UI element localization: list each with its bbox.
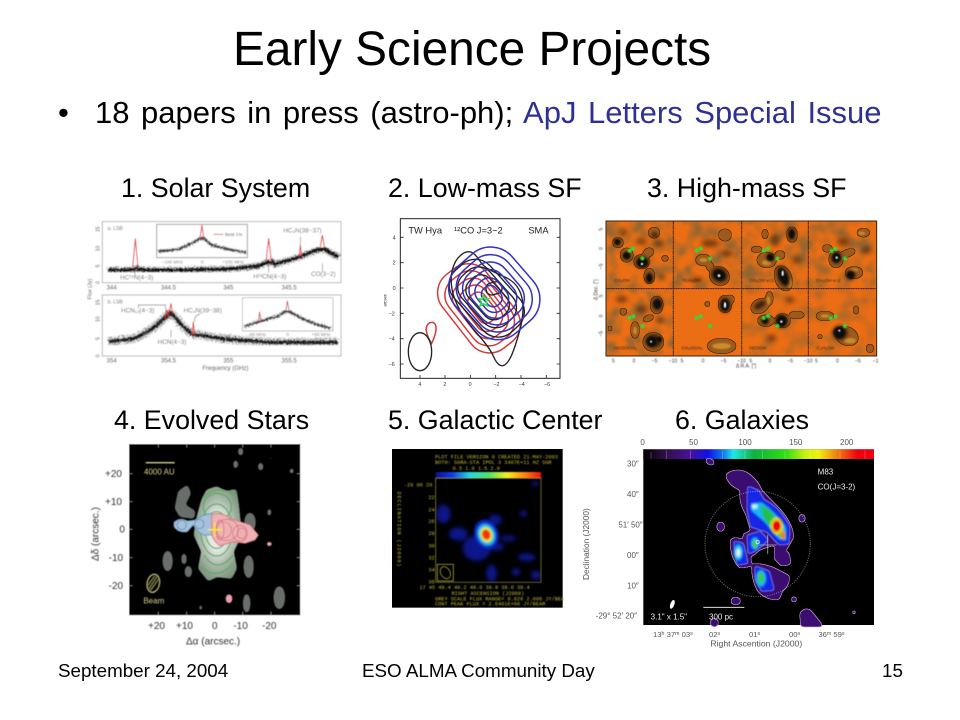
axis labels: Δδ (arcsec.) [90,507,101,561]
map title [408,226,549,236]
channel map axes: −10 [737,359,746,365]
molecule labels: CH₃OH v=2 [816,278,841,283]
inset b: -50 MHz [248,332,267,337]
mottled background [606,221,877,356]
channel map axes: 0 [599,247,605,250]
channel map axes: −5 [855,359,861,365]
spectrum labels: HCN₁₃(4−3) [121,308,154,315]
channel map axes: −5 [721,359,727,365]
spectrum axes: Frequency (GHz) [202,366,248,372]
molecule labels: HCOOH [749,346,767,351]
map axes: −2 [389,311,395,317]
inset b: +50 MHz [312,332,331,337]
map text [395,455,565,608]
inset a: −100 MHz [162,259,184,264]
chart: high-mass SF channel maps [592,220,879,370]
spectrum axes: 344 [107,285,117,291]
axis labels: 0 [212,621,218,632]
declination labels: 00″ [627,551,639,560]
map title: TW Hya [408,226,443,236]
dark cores [615,230,854,347]
heading: galactic center: 5. Galactic Center [388,405,602,435]
molecule labels: ¹³CH₃OH [682,278,700,283]
axis labels: +10 [105,497,122,508]
spectrum labels [108,226,335,346]
chart: evolved star map [90,444,300,648]
channel map axes: −5 [599,331,605,337]
map text: -29 00 20 [404,482,432,488]
spectrum axes: 355 [223,359,234,365]
channel map axes: 5 [612,359,615,365]
footer: date: September 24, 2004 [58,660,228,681]
spectrum labels: CO(3−2) [311,271,335,278]
brown contour blobs [608,227,873,353]
spectrum labels: b. LSB [108,299,123,305]
inset b: 0 [286,332,289,337]
red lobe [212,514,272,603]
blue emission [734,486,790,591]
map axes: −4 [389,337,395,343]
beam ellipse [143,573,165,606]
color bar [436,472,541,478]
spectrum labels: H¹³CN(4−3) [253,274,286,281]
map axes: −4 [519,382,525,388]
map legend: CO(J=3-2) [818,483,856,492]
spectrum axes: 345.5 [282,285,297,291]
white peaks [641,256,840,343]
spectrum labels: a. LSB [108,226,123,232]
channel map axes [593,228,879,370]
emission [436,481,541,582]
map axes [383,235,550,388]
channel map axes: Δ Dec. ["] [593,279,599,300]
declination labels: Declination (J2000) [581,508,591,580]
map text: 26 [428,519,435,525]
chart: galactic center map [392,449,565,608]
spectrum labels: HC¹⁵N(4−3) [120,274,153,281]
footer: page number: 15 [882,660,903,681]
channel map axes: 0 [769,359,772,365]
map text: 28 [428,531,435,537]
molecule labels: C₂H₅OH [817,346,834,351]
map axes: −2 [493,382,499,388]
map text: 34 [428,567,435,573]
channel map axes: −1 [873,359,879,365]
inset a [157,224,247,264]
map text: CONT PEAK FLUX = 2.6401E+00 JY/BEAM [435,602,545,608]
axis labels: -10 [109,553,124,564]
title: Early Science Projects [233,23,711,76]
colorbar labels [640,438,854,447]
chart: TW Hya contour map [383,218,560,388]
beam and scale: 300 pc [709,612,733,621]
map frame [436,478,541,582]
panel grid [606,221,877,356]
beam box [437,564,453,581]
spectrum axes: 5 [96,337,102,340]
scale bar: 4000 AU [144,467,175,476]
spectrum axes: 5 [96,264,102,267]
map axes: 0 [393,286,396,292]
channel map axes: 5 [599,228,605,231]
channel map axes: 0 [702,359,705,365]
map text: 24 [428,507,435,513]
declination labels: 40″ [627,490,639,499]
colorbar labels: 200 [840,438,854,447]
inset a: 0 [201,259,204,264]
spectrum labels: HC₃N(39−38) [184,308,222,315]
right ascension labels: 13ʰ 37ᵐ 03ˢ [653,630,693,639]
beam ellipse: Beam [143,597,165,606]
map axes: arcsec [383,293,388,307]
declination labels: 30″ [627,460,639,469]
right ascension labels: 00ˢ [789,630,801,639]
gold highlights [633,232,865,349]
outflow contours [201,490,235,573]
map text: 36 [428,580,435,586]
axis labels: +20 [148,621,165,632]
black contours [408,251,533,371]
map text: DECLINATION (J2000) [395,492,401,567]
axis labels: +10 [176,621,193,632]
inset b [242,298,333,337]
axis labels: -20 [109,581,124,592]
right ascension labels [653,630,845,648]
footer: event: ESO ALMA Community Day [362,660,595,681]
declination labels: 51′ 50″ [618,520,643,529]
molecule labels: HCOOCH₃ [614,346,637,351]
colorbar labels: 50 [689,438,698,447]
axis labels: +20 [105,469,122,480]
axis labels: -20 [262,621,277,632]
spectrum axes [88,226,297,372]
heading: solar system: 1. Solar System [121,173,310,203]
map title: ¹²CO J=3−2 [454,226,503,236]
channel map axes: 5 [599,294,605,297]
channel map axes: −5 [787,359,793,365]
bipolar outflow body [194,487,242,581]
chart: M83 CO map [581,438,874,648]
spectrum axes: 345 [223,285,234,291]
colorbar labels: 100 [738,438,752,447]
dark core halos [614,228,856,348]
channel map axes: −10 [804,359,813,365]
map legend [818,467,856,492]
map axes: 2 [393,261,396,267]
axis labels [90,469,277,648]
channel map axes: −5 [652,359,658,365]
beam and scale [651,599,744,621]
spectrum axes: Flux (Jy) [88,279,94,299]
map text: PLOT FILE VERSION 0 CREATED 21-MAY-2003 [435,455,558,461]
map legend: M83 [818,467,834,476]
colorbar labels: 0 [640,438,645,447]
spectrum b [108,303,338,342]
declination labels [581,460,643,621]
color bar [643,449,874,459]
molecule labels [614,278,841,351]
channel map axes: 0 [599,314,605,317]
purple emission [705,457,856,627]
channel map axes: 0 [836,359,839,365]
spectrum axes: 15 [96,226,102,232]
channel map axes: 5 [815,359,818,365]
map axes: −6 [544,382,550,388]
heading: evolved stars: 4. Evolved Stars [114,405,309,435]
icon: green star [479,295,489,306]
icon: yellow cross [208,523,222,537]
declination labels: 10″ [627,582,639,591]
inset a: +100 MHz [222,259,244,264]
spectrum axes: 344.5 [161,285,177,291]
map axes: 2 [443,382,446,388]
spectrum axes: 355.5 [282,359,297,365]
scale bar [144,463,175,476]
red contours [426,254,530,362]
channel map axes: 5 [681,359,684,365]
channel map axes: −10 [669,359,677,365]
map text: 32 [428,555,435,561]
map axes: 4 [418,382,421,388]
map text: RIGHT ASCENSION (J2000) [452,591,524,597]
heading: galaxies: 6. Galaxies [675,405,809,435]
map text: 30 [428,543,435,549]
inset a: Best 1% [225,232,242,237]
spectrum axes: 10 [96,246,102,251]
beam and scale: 3.1" x 1.5" [651,612,687,621]
right ascension labels: 01ˢ [749,630,761,639]
map text: 17 45 40.4 40.2 40.0 39.8 39.6 39.4 [419,585,530,591]
dotted field circle [705,491,810,597]
map axes: 0 [469,382,472,388]
molecule labels: CH₃OH v=1 [749,278,774,283]
chart: solar system spectra [86,220,342,372]
intensity layers [734,502,786,587]
map text: BOTH: SGRA-STA IPOL 3 3407E+11 HZ SGR [435,460,552,466]
blue contours [437,235,552,351]
map text: 0.5 1.0 1.5 2.0 [453,466,500,472]
axis labels: -10 [233,621,248,632]
spectrum axes: 354 [107,359,117,365]
right ascension labels: 02ˢ [709,630,721,639]
axis labels: Δα (arcsec.) [186,637,240,648]
heading: low-mass SF: 2. Low-mass SF [388,173,582,203]
channel map axes: Δ R.A. ["] [736,364,757,370]
grey patches [163,448,294,613]
bullet line: • [58,95,69,130]
declination labels: -29° 52′ 20″ [596,612,637,621]
right ascension labels: Right Ascention (J2000) [710,638,802,648]
bullet line: 18 papers in press (astro-ph); ApJ Letters Special Issue [95,95,882,130]
spectrum labels: HCN(4−3) [158,339,186,346]
channel map axes: 0 [633,359,636,365]
map text: GREY SCALE FLUX RANGE= 0.020 2.000 JY/BEA [435,596,565,602]
channel map axes: −5 [599,263,605,269]
frame ticks [129,444,300,615]
axis labels: 0 [119,525,125,536]
map axes: 4 [393,235,396,241]
channel map axes: 5 [749,359,752,365]
spectrum labels: HC₃N(38−37) [283,228,322,235]
heading: high-mass SF: 3. High-mass SF [647,173,847,203]
spectrum a [108,235,339,270]
map text: 22 [428,495,435,501]
molecule labels: CH₃OCH₃ [682,346,703,351]
spectrum axes: 10 [96,316,102,322]
map axes: −6 [389,362,395,368]
map title: SMA [528,226,549,236]
right ascension labels: 36ᵐ 59ˢ [818,630,845,639]
spectrum axes: 15 [96,300,102,305]
nucleus cross [759,535,777,554]
molecule labels: CH₃OH [614,278,630,283]
faint dark patches [616,229,871,342]
blue lobe [174,513,213,535]
spectrum axes: 0 [96,354,102,357]
spectrum axes: 354.5 [161,359,177,365]
green source markers [627,247,847,328]
colorbar labels: 150 [789,438,803,447]
spectrum axes: 0 [96,281,102,284]
